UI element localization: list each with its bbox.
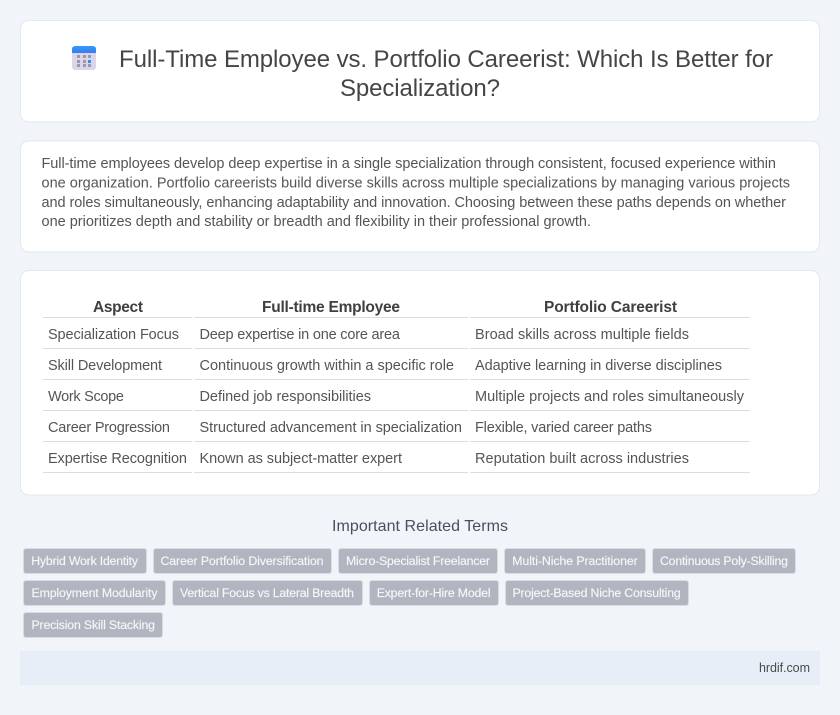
chip: Precision Skill Stacking (32, 618, 155, 632)
chip (24, 580, 166, 606)
row: expertise recognition: Expertise Recognition (48, 451, 187, 467)
row: skill development: Continuous growth within a specific role (200, 358, 454, 374)
row: work scope: Work Scope (48, 389, 124, 405)
row: expertise recognition (48, 451, 689, 467)
chip: Micro-Specialist Freelancer (346, 554, 490, 568)
row: specialization focus: Specialization Focus (48, 327, 179, 343)
row: work scope: Defined job responsibilities (200, 389, 371, 405)
panel: header (20, 20, 820, 122)
chip (172, 580, 362, 606)
footer (20, 651, 820, 685)
related term chips (24, 548, 796, 638)
title: Specialization? (340, 75, 500, 102)
row: career progression (48, 420, 652, 436)
row: expertise recognition: Known as subject-matter expert (200, 451, 402, 467)
heading: important related terms: Important Related Terms (332, 518, 508, 535)
summary text: one prioritizes depth and stability or breadth and flexibility in their professional growth. (42, 214, 591, 230)
row: work scope (48, 389, 745, 405)
panel: summary (20, 141, 820, 252)
chip: Continuous Poly-Skilling (660, 554, 788, 568)
summary text: one organization. Portfolio careerists build diverse skills across multiple specializations by managing various projects (42, 176, 790, 192)
chip: Project-Based Niche Consulting (512, 586, 681, 600)
row: career progression: Structured advancement in specialization (200, 420, 462, 436)
chip (504, 548, 646, 574)
table header row: Aspect (93, 299, 143, 316)
table header row: Portfolio Careerist (544, 299, 677, 316)
row: work scope: Multiple projects and roles simultaneously (475, 389, 745, 405)
icon: calendar (72, 46, 96, 70)
row: skill development: Skill Development (48, 358, 162, 374)
table header row: Full-time Employee (262, 299, 400, 316)
footer: hrdif.com (759, 661, 810, 675)
chip: Career Portfolio Diversification (160, 554, 324, 568)
row: specialization focus: Broad skills across multiple fields (475, 327, 689, 343)
row: specialization focus (48, 327, 689, 343)
row: career progression: Flexible, varied career paths (475, 420, 652, 436)
summary text: and roles simultaneously, enhancing adaptability and innovation. Choosing between these paths depends on whether (42, 195, 786, 211)
chip (506, 580, 688, 606)
chip (652, 548, 796, 574)
chip (370, 580, 498, 606)
summary text: Full-time employees develop deep expertise in a single specialization through consistent, focused experience within (42, 156, 776, 172)
chip: Expert-for-Hire Model (377, 586, 490, 600)
table rules (43, 317, 750, 473)
chip (338, 548, 498, 574)
summary text (42, 156, 790, 230)
chip (24, 548, 146, 574)
chip (154, 548, 332, 574)
chip: Hybrid Work Identity (31, 554, 139, 568)
chip (24, 612, 162, 638)
panel: comparison table (20, 270, 820, 495)
row: skill development: Adaptive learning in diverse disciplines (475, 358, 722, 374)
chip: Vertical Focus vs Lateral Breadth (180, 586, 354, 600)
row: expertise recognition: Reputation built across industries (475, 451, 689, 467)
row: skill development (48, 358, 722, 374)
title: Full-Time Employee vs. Portfolio Careerist: Which Is Better for (119, 46, 773, 73)
row: career progression: Career Progression (48, 420, 170, 436)
chip: Employment Modularity (32, 586, 158, 600)
table header row (93, 299, 677, 316)
chip: Multi-Niche Practitioner (512, 554, 638, 568)
row: specialization focus: Deep expertise in one core area (200, 327, 401, 343)
title (119, 46, 773, 102)
